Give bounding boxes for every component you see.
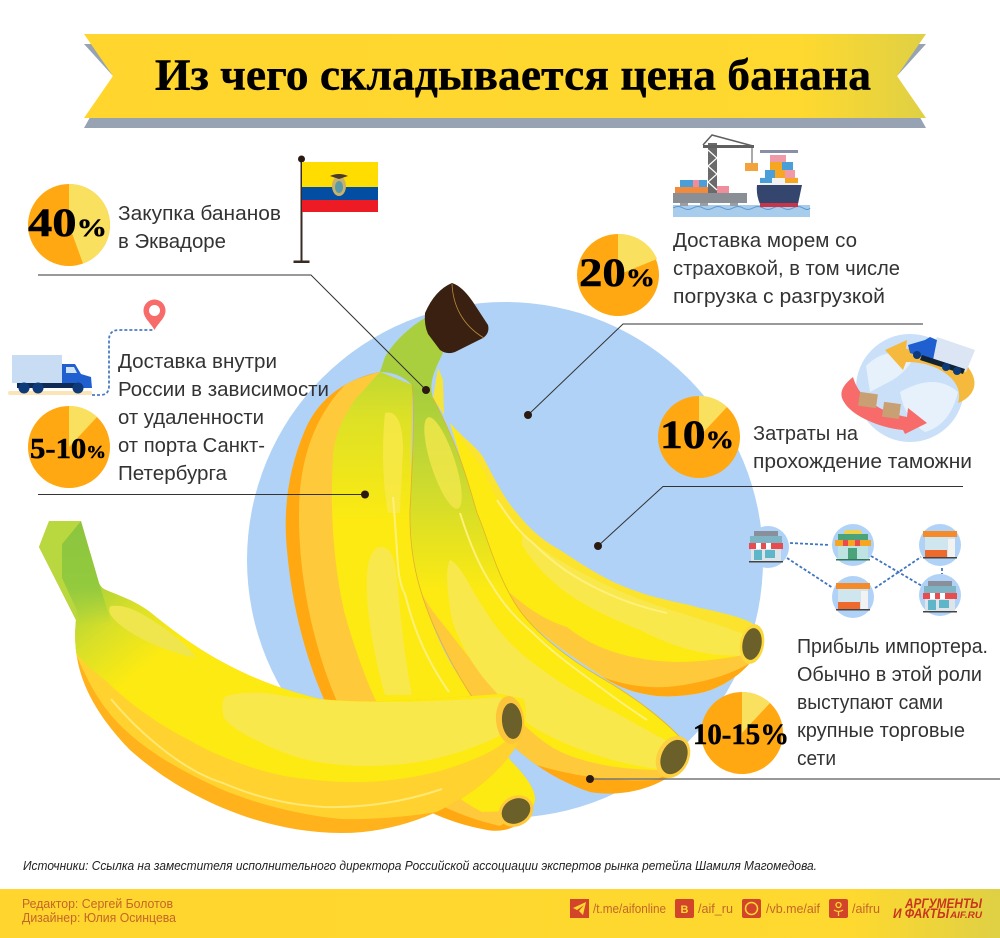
banana: back sliver	[433, 368, 444, 415]
leader line: purchase	[38, 275, 430, 394]
icon: Ecuador flag	[294, 156, 378, 263]
pie: 5-10%	[28, 406, 110, 488]
text: customs	[753, 423, 972, 473]
value: 10-15%: 10-15%	[693, 718, 789, 751]
text: sea delivery: погрузка с разгрузкой	[673, 286, 885, 308]
text: importer profit: Обычно в этой роли	[797, 664, 982, 686]
sources: Источники: Ссылка на заместителя исполнительного директора Российской ассоциации экспертов рынка ретейла Шамиля Магомедова.	[23, 858, 817, 873]
text: importer profit	[797, 636, 988, 770]
text: importer profit: выступают сами	[797, 692, 943, 714]
banana tip: left large	[493, 789, 539, 833]
text: domestic delivery	[118, 351, 329, 485]
banana stem	[380, 318, 443, 398]
text: sea delivery: Доставка морем со	[673, 230, 857, 252]
banana: left large	[286, 372, 536, 831]
value: 20%: 20 %	[579, 250, 655, 295]
social links: /vb.me/aif	[766, 901, 820, 916]
value: 40%: 40 %	[28, 200, 107, 245]
banana: back right	[450, 423, 754, 696]
text: domestic delivery: от удаленности	[118, 407, 264, 429]
social links: /t.me/aifonline	[593, 901, 666, 916]
pie: 10-15%	[693, 692, 789, 774]
logo: АРГУМЕНТЫ	[904, 895, 983, 911]
leader line: importer profit	[586, 775, 1000, 783]
leader line: domestic delivery	[38, 490, 369, 498]
social links	[570, 899, 880, 918]
text: domestic delivery: России в зависимости	[118, 379, 329, 401]
footer bar	[0, 889, 1000, 938]
pie: 40%	[28, 184, 110, 266]
text: domestic delivery: Доставка внутри	[118, 351, 277, 373]
text: domestic delivery: Петербурга	[118, 463, 228, 485]
text: importer profit: Прибыль импортера.	[797, 636, 988, 658]
icon: globe with arrows	[841, 334, 975, 442]
logo: И ФАКТЫ	[893, 905, 950, 921]
credits: Дизайнер: Юлия Осинцева	[22, 910, 177, 925]
pie: 20%	[577, 234, 659, 316]
text: domestic delivery: от порта Санкт-	[118, 435, 265, 457]
banana tip: front	[494, 695, 526, 745]
icon: retail network	[747, 524, 961, 618]
text: purchase in Ecuador	[118, 203, 281, 253]
banana tip: back right	[737, 622, 767, 666]
leader line: sea delivery	[524, 324, 923, 419]
logo	[893, 895, 983, 921]
text: purchase in Ecuador: в Эквадоре	[118, 231, 226, 253]
value: 10%: 10%	[660, 412, 734, 457]
banana tip: middle	[649, 730, 697, 784]
social links: /aifru	[852, 901, 880, 916]
credits: Редактор: Сергей Болотов	[22, 896, 173, 911]
credits	[22, 896, 177, 925]
text: customs: Затраты на	[753, 423, 859, 445]
pie: 10%	[658, 396, 740, 478]
value: 5-10%: 5-10 %	[30, 434, 106, 465]
text: importer profit: крупные торговые	[797, 720, 965, 742]
text: sea delivery	[673, 230, 900, 308]
text: customs: прохождение таможни	[753, 451, 972, 473]
icon: truck	[8, 355, 92, 395]
icon: map pin and route	[92, 300, 166, 395]
banana: middle	[410, 385, 678, 794]
social links: /aif_ru	[698, 901, 733, 916]
icon: sea port	[673, 135, 810, 217]
title banner	[84, 34, 926, 128]
text: purchase in Ecuador: Закупка бананов	[118, 203, 281, 225]
text: importer profit: сети	[797, 748, 836, 770]
title: Из чего складывается цена банана	[155, 50, 871, 100]
text: sea delivery: страховкой, в том числе	[673, 258, 900, 280]
social links: В	[681, 904, 689, 916]
blue circle background	[247, 302, 763, 818]
logo: AIF.RU	[949, 910, 983, 920]
banana: front	[30, 515, 540, 840]
banana stem cap	[425, 283, 488, 353]
leader line: customs	[594, 486, 963, 550]
